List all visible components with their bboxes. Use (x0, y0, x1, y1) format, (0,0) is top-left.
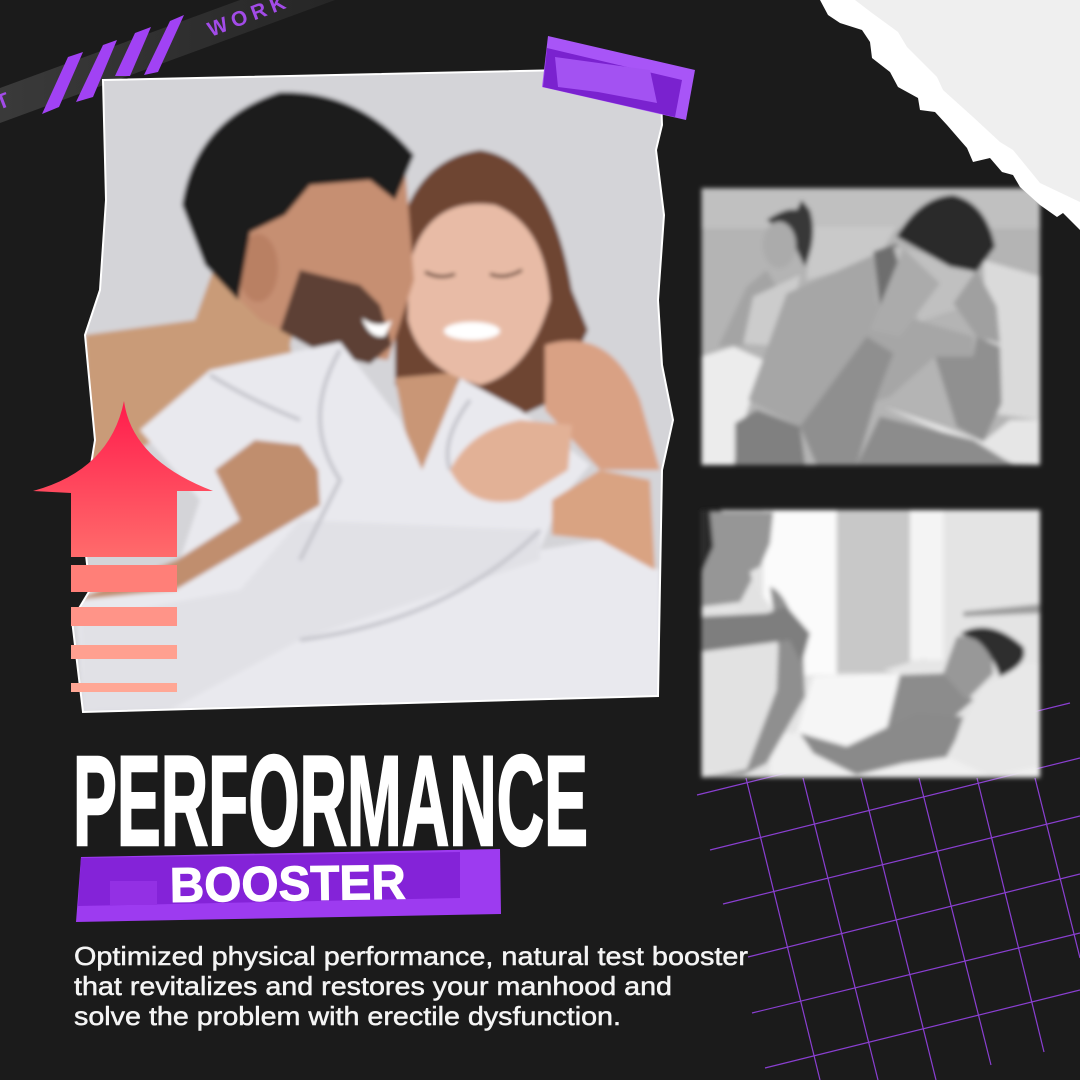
title: PERFORMANCE (73, 730, 588, 873)
description: Optimized physical performance, natural test booster (74, 941, 748, 971)
grid lines (697, 703, 1080, 1080)
photo: disappointed woman and sleeping man (702, 510, 1040, 777)
duvet (75, 342, 660, 712)
woman's shoulder (545, 341, 660, 470)
torn paper corner (820, 0, 1080, 230)
woman's hands (450, 420, 572, 502)
man's face (238, 174, 416, 362)
tape: top right of photo (542, 36, 695, 120)
man's neck and shoulder (86, 270, 294, 460)
ribbon text (0, 0, 294, 115)
banner text: BOOSTER (169, 856, 406, 913)
top-left ribbon (0, 0, 335, 123)
woman's face (408, 204, 550, 385)
man's arm (75, 440, 320, 600)
woman's hair (395, 150, 588, 425)
description: solve the problem with erectile dysfunction. (74, 1001, 621, 1031)
subtitle banner (76, 849, 501, 922)
description (74, 941, 748, 1031)
photo: upset man on bed (702, 188, 1040, 465)
woman's chest (393, 371, 460, 470)
man's hair (182, 92, 414, 300)
ribbon stripes (42, 15, 184, 114)
photo: happy couple (60, 60, 680, 720)
description: that revitalizes and restores your manhood and (74, 971, 672, 1001)
arrow graphic (33, 401, 213, 692)
